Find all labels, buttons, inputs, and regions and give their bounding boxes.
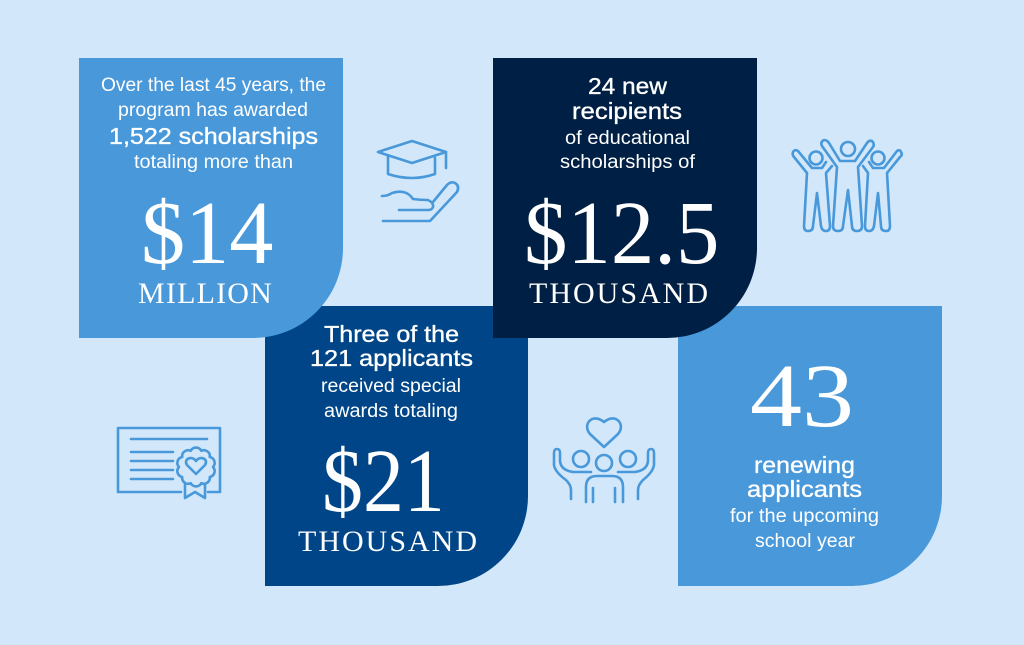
text: received special awards totaling: received special: [321, 376, 461, 397]
panel: $12.5 thousand new recipients: [493, 58, 757, 338]
number: $21: $21: [322, 430, 445, 531]
text: 24 new recipients: recipients: [572, 98, 682, 124]
text: over the last 45 years: Over the last 45 years, the: [101, 75, 326, 96]
text: three of the 121 applicants: Three of the: [324, 321, 459, 347]
text: totaling more than: totaling more than: [134, 152, 293, 173]
text: over the last 45 years: program has awarded: [118, 100, 308, 121]
panel: $21 thousand special awards: [265, 306, 528, 586]
text: received special awards totaling: awards totaling: [324, 401, 458, 422]
text: three of the 121 applicants: 121 applicants: [310, 345, 473, 371]
text: for the upcoming school year: for the upcoming: [730, 506, 879, 527]
unit: thousand: THOUSAND: [529, 277, 710, 310]
text: 24 new recipients: 24 new: [588, 73, 667, 99]
panel: $14 million scholarships: [79, 58, 343, 338]
text: renewing applicants: applicants: [747, 476, 862, 502]
text: of educational scholarships of: [560, 128, 696, 173]
number: $14: $14: [141, 184, 273, 283]
text: 1,522 scholarships: 1,522 scholarships: [109, 123, 318, 149]
icon: certificate with heart seal: [118, 428, 220, 498]
number: 43: 43: [750, 346, 854, 446]
text: three of the 121 applicants: [310, 321, 473, 371]
text: over the last 45 years: [101, 75, 326, 121]
text: of educational scholarships of: scholarships of: [560, 152, 696, 173]
icon: three people under a heart: [554, 418, 654, 502]
text: of educational scholarships of: of educational: [565, 128, 690, 149]
text: for the upcoming school year: school year: [755, 531, 856, 552]
text: 24 new recipients: [572, 73, 682, 124]
panel: 43 renewing applicants: [678, 306, 942, 586]
icon: graduation cap above open hand: [378, 141, 458, 221]
text: received special awards totaling: [321, 376, 461, 422]
unit: million: MILLION: [138, 277, 273, 310]
text: renewing applicants: [747, 452, 862, 502]
number: $12.5: $12.5: [524, 184, 719, 283]
text: for the upcoming school year: [730, 506, 879, 552]
icon: three people with raised arms: [793, 140, 902, 231]
text: renewing applicants: renewing: [754, 452, 855, 478]
unit: thousand: THOUSAND: [298, 525, 479, 558]
